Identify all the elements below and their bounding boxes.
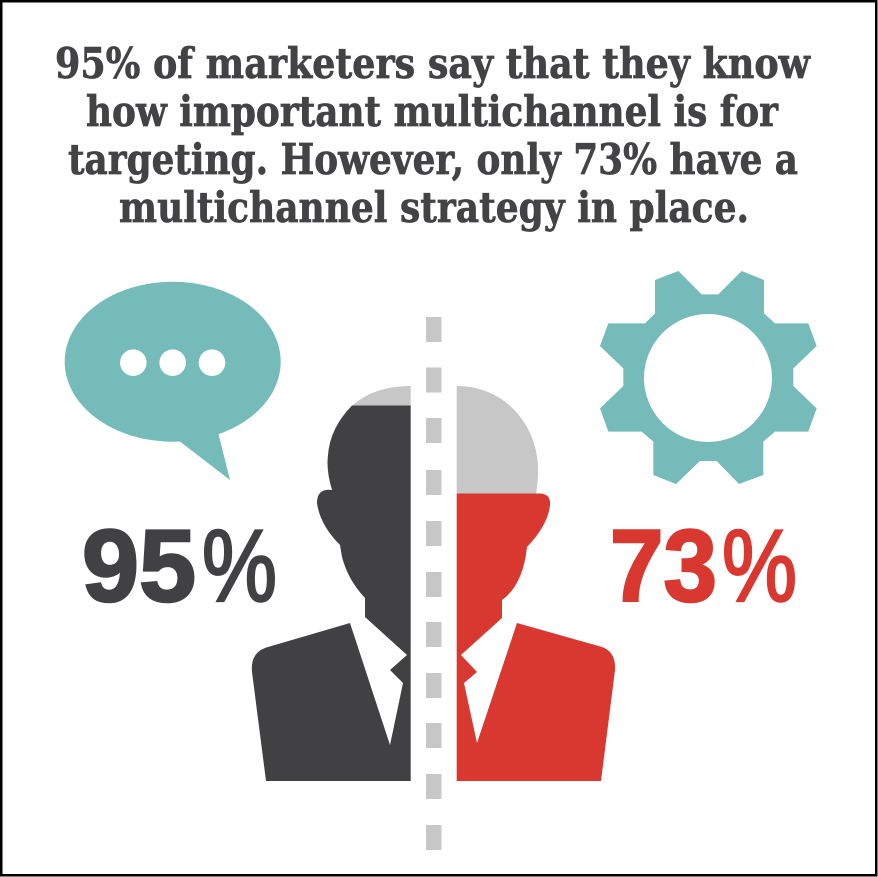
stat: 73%: 73 <box>610 509 717 623</box>
title: how important multichannel is for <box>86 87 779 136</box>
silhouette, dark <box>252 406 411 781</box>
figure: right half, red (73%) <box>457 386 615 781</box>
stat: 73%: % <box>722 509 797 623</box>
dashed divider <box>426 317 442 850</box>
icon: gear <box>600 271 817 484</box>
icon: speech bubble <box>65 282 281 480</box>
stat: 95%: 95 <box>82 509 196 623</box>
head top, grey <box>457 386 538 494</box>
stat: 95%: % <box>202 509 277 623</box>
figure: left half, dark (95%) <box>252 386 411 781</box>
title: multichannel strategy in place. <box>119 183 749 232</box>
title <box>55 39 811 232</box>
silhouette, red <box>457 494 615 781</box>
head top, grey <box>352 386 411 406</box>
